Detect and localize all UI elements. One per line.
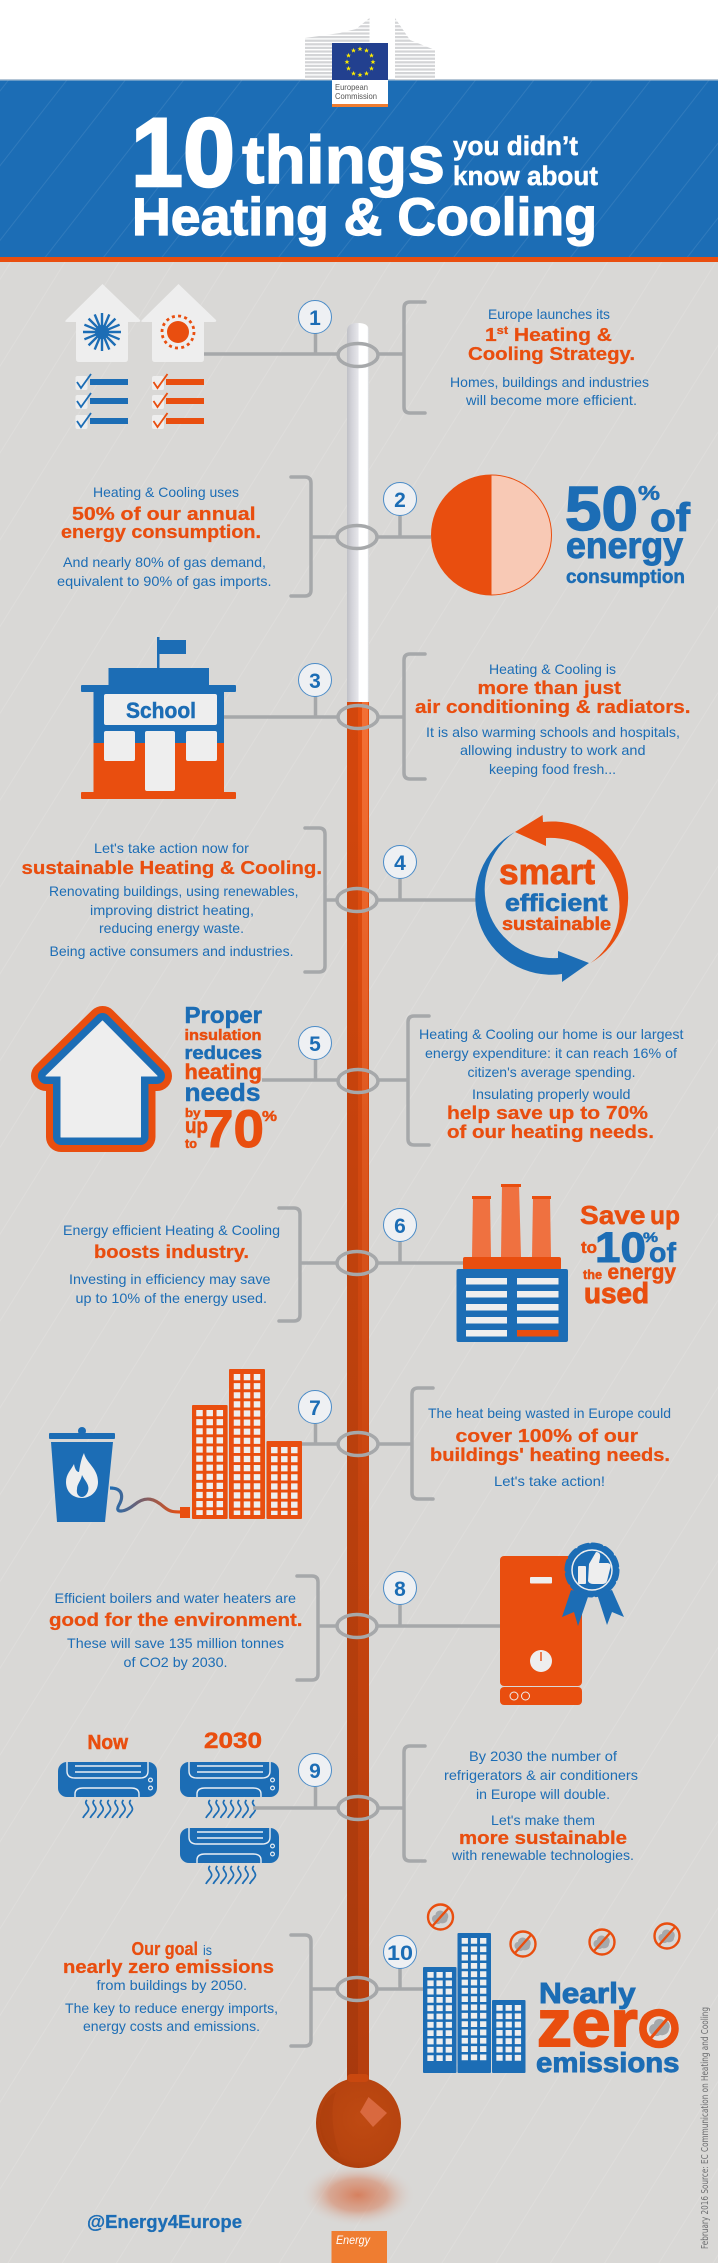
icon: thumbs-up medal bbox=[562, 1545, 624, 1626]
text block 2: Heating & Cooling uses bbox=[93, 484, 239, 500]
text block 6: Investing in efficiency may save bbox=[69, 1271, 271, 1287]
text block 5: citizen's average spending. bbox=[468, 1064, 636, 1080]
pie chart: 50 percent bbox=[432, 475, 552, 595]
text block 6: up to 10% of the energy used. bbox=[76, 1290, 267, 1306]
bracket 7 bbox=[412, 1388, 433, 1499]
stat: 50% of energy consumption: energy bbox=[566, 525, 683, 566]
logo: European Commission: Commission bbox=[335, 91, 377, 101]
badge 4 bbox=[384, 846, 416, 878]
title: know about bbox=[453, 161, 598, 191]
badge 6 bbox=[384, 1208, 416, 1242]
badge 10 bbox=[384, 1936, 416, 1968]
panel: item 5 bbox=[46, 1002, 684, 1159]
badge 7 bbox=[298, 1390, 332, 1424]
text block 10: is bbox=[203, 1942, 212, 1958]
ring 6 bbox=[337, 1252, 377, 1274]
text block 1: Cooling Strategy. bbox=[468, 344, 635, 364]
stat: insulation reduces heating needs: % bbox=[262, 1108, 277, 1125]
heading: 2030: 2030 bbox=[204, 1728, 262, 1753]
twitter handle: @Energy4Europe bbox=[87, 2212, 242, 2232]
cycle words: efficient bbox=[505, 890, 608, 917]
panel: item 4 bbox=[22, 815, 628, 982]
title bbox=[131, 98, 598, 247]
ring 4 bbox=[337, 888, 377, 912]
text block 7: buildings' heating needs. bbox=[430, 1445, 670, 1465]
stat: 50% of energy consumption: consumption bbox=[566, 567, 685, 588]
icon: cycle arrows bbox=[475, 815, 628, 982]
badge 4: 4 bbox=[394, 852, 406, 875]
text block 9: with renewable technologies. bbox=[451, 1847, 634, 1863]
stat: save up to 10%: to bbox=[581, 1238, 597, 1257]
stat: save up to 10%: 10 bbox=[595, 1224, 646, 1272]
bracket 10 bbox=[291, 1935, 311, 2046]
text block 4: Let's take action now for bbox=[94, 840, 249, 856]
text block 2: equivalent to 90% of gas imports. bbox=[57, 573, 272, 589]
badge 2 bbox=[384, 482, 416, 516]
energy tag: Energy bbox=[336, 2233, 371, 2247]
icon: checklist bbox=[76, 374, 204, 429]
header banner bbox=[0, 79, 718, 262]
text block 1: Heating & bbox=[508, 325, 612, 345]
text block 5: help save up to 70% bbox=[447, 1103, 648, 1123]
title: you didn’t bbox=[453, 131, 578, 161]
panel: item 2 bbox=[57, 475, 691, 596]
text block 10: from buildings by 2050. bbox=[96, 1977, 247, 1993]
icon: boiler bbox=[500, 1556, 582, 1705]
stat: save up to 10%: % bbox=[643, 1229, 659, 1245]
badge 5: 5 bbox=[309, 1033, 321, 1056]
stat: insulation reduces heating needs: up bbox=[185, 1115, 208, 1138]
text block 5: Insulating properly would bbox=[472, 1086, 630, 1102]
title: Heating & Cooling bbox=[132, 188, 597, 247]
icon: school: School bbox=[126, 698, 196, 723]
text block 7 bbox=[428, 1405, 671, 1489]
text block 9 bbox=[444, 1748, 638, 1863]
text block 1 bbox=[450, 306, 649, 408]
text block 9: Let's make them bbox=[491, 1812, 595, 1828]
icon: blue buildings bbox=[423, 1933, 526, 2073]
panel: item 7 bbox=[49, 1369, 671, 1522]
icon: air conditioner now bbox=[58, 1762, 157, 1818]
stat: insulation reduces heating needs: by bbox=[185, 1106, 201, 1120]
stat: insulation reduces heating needs: insulation bbox=[184, 1027, 262, 1044]
stat: 50% of energy consumption: % bbox=[638, 483, 660, 505]
stat: 50% of energy consumption bbox=[565, 475, 691, 588]
text block 4: Being active consumers and industries. bbox=[50, 943, 294, 959]
badge 2: 2 bbox=[394, 489, 406, 512]
connector 10 bbox=[311, 1968, 423, 1989]
badge 10: 10 bbox=[387, 1942, 413, 1965]
text block 8: of CO2 by 2030. bbox=[124, 1654, 228, 1670]
connector 8 bbox=[318, 1605, 500, 1626]
text block 7: cover 100% of our bbox=[456, 1426, 638, 1446]
stat: insulation reduces heating needs: needs bbox=[184, 1079, 260, 1107]
text block 3: allowing industry to work and bbox=[460, 742, 646, 758]
cycle words bbox=[499, 851, 611, 934]
panel: item 3 bbox=[81, 637, 690, 799]
text block 8: Efficient boilers and water heaters are bbox=[54, 1590, 296, 1606]
text block 6: boosts industry. bbox=[94, 1242, 249, 1262]
badge 3 bbox=[298, 664, 332, 696]
badge 6: 6 bbox=[394, 1215, 406, 1238]
thermometer bbox=[300, 323, 416, 2227]
text block 10: nearly zero emissions bbox=[63, 1957, 274, 1977]
text block 10: energy costs and emissions. bbox=[83, 2018, 260, 2034]
text block 1: will become more efficient. bbox=[465, 392, 637, 408]
ring 5 bbox=[338, 1070, 378, 1092]
stat: insulation reduces heating needs: Proper bbox=[184, 1002, 262, 1028]
stat: save up to 10% bbox=[580, 1200, 680, 1310]
title: things bbox=[242, 122, 445, 198]
stat: save up to 10%: up bbox=[650, 1200, 680, 1230]
bracket 5 bbox=[408, 1016, 429, 1145]
stat: save up to 10%: the bbox=[583, 1267, 602, 1282]
ring 9 bbox=[338, 1796, 378, 1820]
text block 3: Heating & Cooling is bbox=[489, 661, 616, 677]
text block 2: 50% of our annual bbox=[72, 504, 256, 524]
logo: European Commission bbox=[305, 18, 435, 107]
text block 7: Let's take action! bbox=[494, 1473, 605, 1489]
ring 8 bbox=[337, 1614, 377, 1638]
panel: item 10 bbox=[63, 1904, 680, 2078]
connector 2 bbox=[311, 516, 431, 537]
panel: item 8 bbox=[49, 1545, 624, 1705]
text block 1: Europe launches its bbox=[488, 306, 610, 322]
bracket 2 bbox=[291, 477, 311, 596]
stat: insulation reduces heating needs: heating bbox=[184, 1061, 262, 1084]
bracket 6 bbox=[279, 1208, 300, 1321]
text block 8 bbox=[49, 1590, 302, 1670]
text block 6 bbox=[63, 1222, 280, 1306]
text block 3: air conditioning & radiators. bbox=[415, 697, 690, 717]
text block 4: reducing energy waste. bbox=[99, 920, 244, 936]
text block 2: energy consumption. bbox=[61, 522, 261, 542]
energy tag bbox=[332, 2231, 387, 2263]
text block 9: more sustainable bbox=[459, 1828, 627, 1848]
badge 3: 3 bbox=[309, 670, 321, 693]
text block 4: improving district heating, bbox=[90, 902, 254, 918]
panel: item 1 bbox=[65, 284, 649, 429]
stat: save up to 10%: Save bbox=[580, 1200, 646, 1230]
stat: save up to 10%: of bbox=[649, 1237, 677, 1268]
stat: nearly zero emissions: zero bbox=[537, 1986, 680, 2060]
badge 7: 7 bbox=[309, 1397, 321, 1420]
text block 5: Heating & Cooling our home is our largest bbox=[419, 1026, 684, 1042]
connector 3 bbox=[224, 696, 403, 717]
text block 5: energy expenditure: it can reach 16% of bbox=[425, 1045, 677, 1061]
ring 10 bbox=[337, 1978, 377, 2000]
cycle words: smart bbox=[499, 851, 595, 892]
text block 9: refrigerators & air conditioners bbox=[444, 1767, 638, 1783]
connector 4 bbox=[325, 879, 476, 900]
stat: insulation reduces heating needs: 70 bbox=[203, 1100, 264, 1159]
icon: power cable bbox=[110, 1488, 190, 1518]
stat: save up to 10%: used bbox=[584, 1278, 649, 1310]
text block 8: good for the environment. bbox=[49, 1610, 302, 1630]
icon: waste bin with flame bbox=[49, 1427, 115, 1522]
stat: nearly zero emissions: Nearly bbox=[539, 1978, 636, 2010]
badge 5 bbox=[298, 1026, 332, 1060]
stat: save up to 10%: energy bbox=[608, 1261, 676, 1284]
text block 5: of our heating needs. bbox=[447, 1122, 654, 1142]
heading: now: Now bbox=[88, 1732, 128, 1754]
panel: item 9 bbox=[58, 1728, 638, 1884]
text block 1: 1 bbox=[485, 325, 495, 345]
text block 1: st bbox=[497, 325, 508, 337]
connector 5 bbox=[262, 1060, 407, 1080]
text block 10: Our goal bbox=[132, 1939, 198, 1959]
connector 6 bbox=[300, 1242, 463, 1263]
badge 8: 8 bbox=[394, 1578, 406, 1601]
stat: nearly zero emissions: emissions bbox=[536, 2047, 680, 2078]
connector 1 bbox=[204, 333, 403, 354]
ring 2 bbox=[337, 526, 377, 548]
icon: factory bbox=[456, 1184, 568, 1342]
bracket 3 bbox=[404, 654, 425, 779]
text block 9: By 2030 the number of bbox=[469, 1748, 617, 1764]
badge 8 bbox=[384, 1572, 416, 1604]
connector 9 bbox=[253, 1787, 404, 1808]
stat: insulation reduces heating needs: reduces bbox=[184, 1043, 262, 1063]
text block 10: The key to reduce energy imports, bbox=[65, 2000, 278, 2016]
badge 9 bbox=[298, 1754, 332, 1786]
icon: houses with snowflake and sun bbox=[65, 284, 216, 362]
text block 8: These will save 135 million tonnes bbox=[67, 1635, 284, 1651]
bracket 8 bbox=[297, 1576, 318, 1680]
bracket 1 bbox=[404, 302, 425, 413]
badge 1: 1 bbox=[309, 307, 321, 330]
text block 3: keeping food fresh... bbox=[489, 761, 616, 777]
text block 3 bbox=[415, 661, 690, 777]
icon: air conditioner 2030 top bbox=[180, 1762, 279, 1818]
title: 10 bbox=[131, 98, 235, 207]
panel: item 6 bbox=[63, 1184, 680, 1342]
cycle words: sustainable bbox=[502, 914, 611, 934]
icon: orange buildings bbox=[192, 1369, 302, 1519]
source note: February 2016 Source: EC Communication on Heating and Cooling bbox=[700, 2007, 711, 2249]
text block 1: Homes, buildings and industries bbox=[450, 374, 649, 390]
text block 3: more than just bbox=[478, 678, 621, 698]
bracket 9 bbox=[404, 1746, 425, 1861]
text block 6: Energy efficient Heating & Cooling bbox=[63, 1222, 280, 1238]
text block 7: The heat being wasted in Europe could bbox=[428, 1405, 671, 1421]
text block 4: sustainable Heating & Cooling. bbox=[22, 858, 322, 878]
stat: 50% of energy consumption: 50 bbox=[565, 475, 638, 544]
ring 1 bbox=[338, 344, 378, 366]
stat: nearly zero emissions bbox=[536, 1978, 680, 2078]
text block 4: Renovating buildings, using renewables, bbox=[49, 883, 298, 899]
icons: no emissions bbox=[428, 1904, 680, 1956]
badge 1 bbox=[298, 300, 332, 334]
text block 9: in Europe will double. bbox=[476, 1786, 610, 1802]
ring 7 bbox=[338, 1432, 378, 1456]
text block 2 bbox=[57, 484, 272, 589]
logo: European Commission: European bbox=[335, 82, 368, 92]
connector 7 bbox=[302, 1424, 412, 1444]
icon: insulated house bbox=[46, 1021, 157, 1137]
badge 9: 9 bbox=[309, 1760, 321, 1783]
text block 10 bbox=[63, 1939, 278, 2034]
text block 2: And nearly 80% of gas demand, bbox=[63, 554, 266, 570]
icon: air conditioner 2030 bottom bbox=[180, 1828, 279, 1884]
stat: 50% of energy consumption: of bbox=[650, 496, 691, 540]
text block 4 bbox=[22, 840, 322, 959]
text block 5 bbox=[419, 1026, 684, 1142]
bracket 4 bbox=[305, 828, 325, 972]
icon: school bbox=[81, 637, 236, 799]
stat: insulation reduces heating needs: to bbox=[185, 1136, 197, 1151]
stat: insulation reduces heating needs bbox=[184, 1002, 277, 1159]
text block 3: It is also warming schools and hospitals, bbox=[426, 724, 680, 740]
ring 3 bbox=[338, 706, 378, 728]
